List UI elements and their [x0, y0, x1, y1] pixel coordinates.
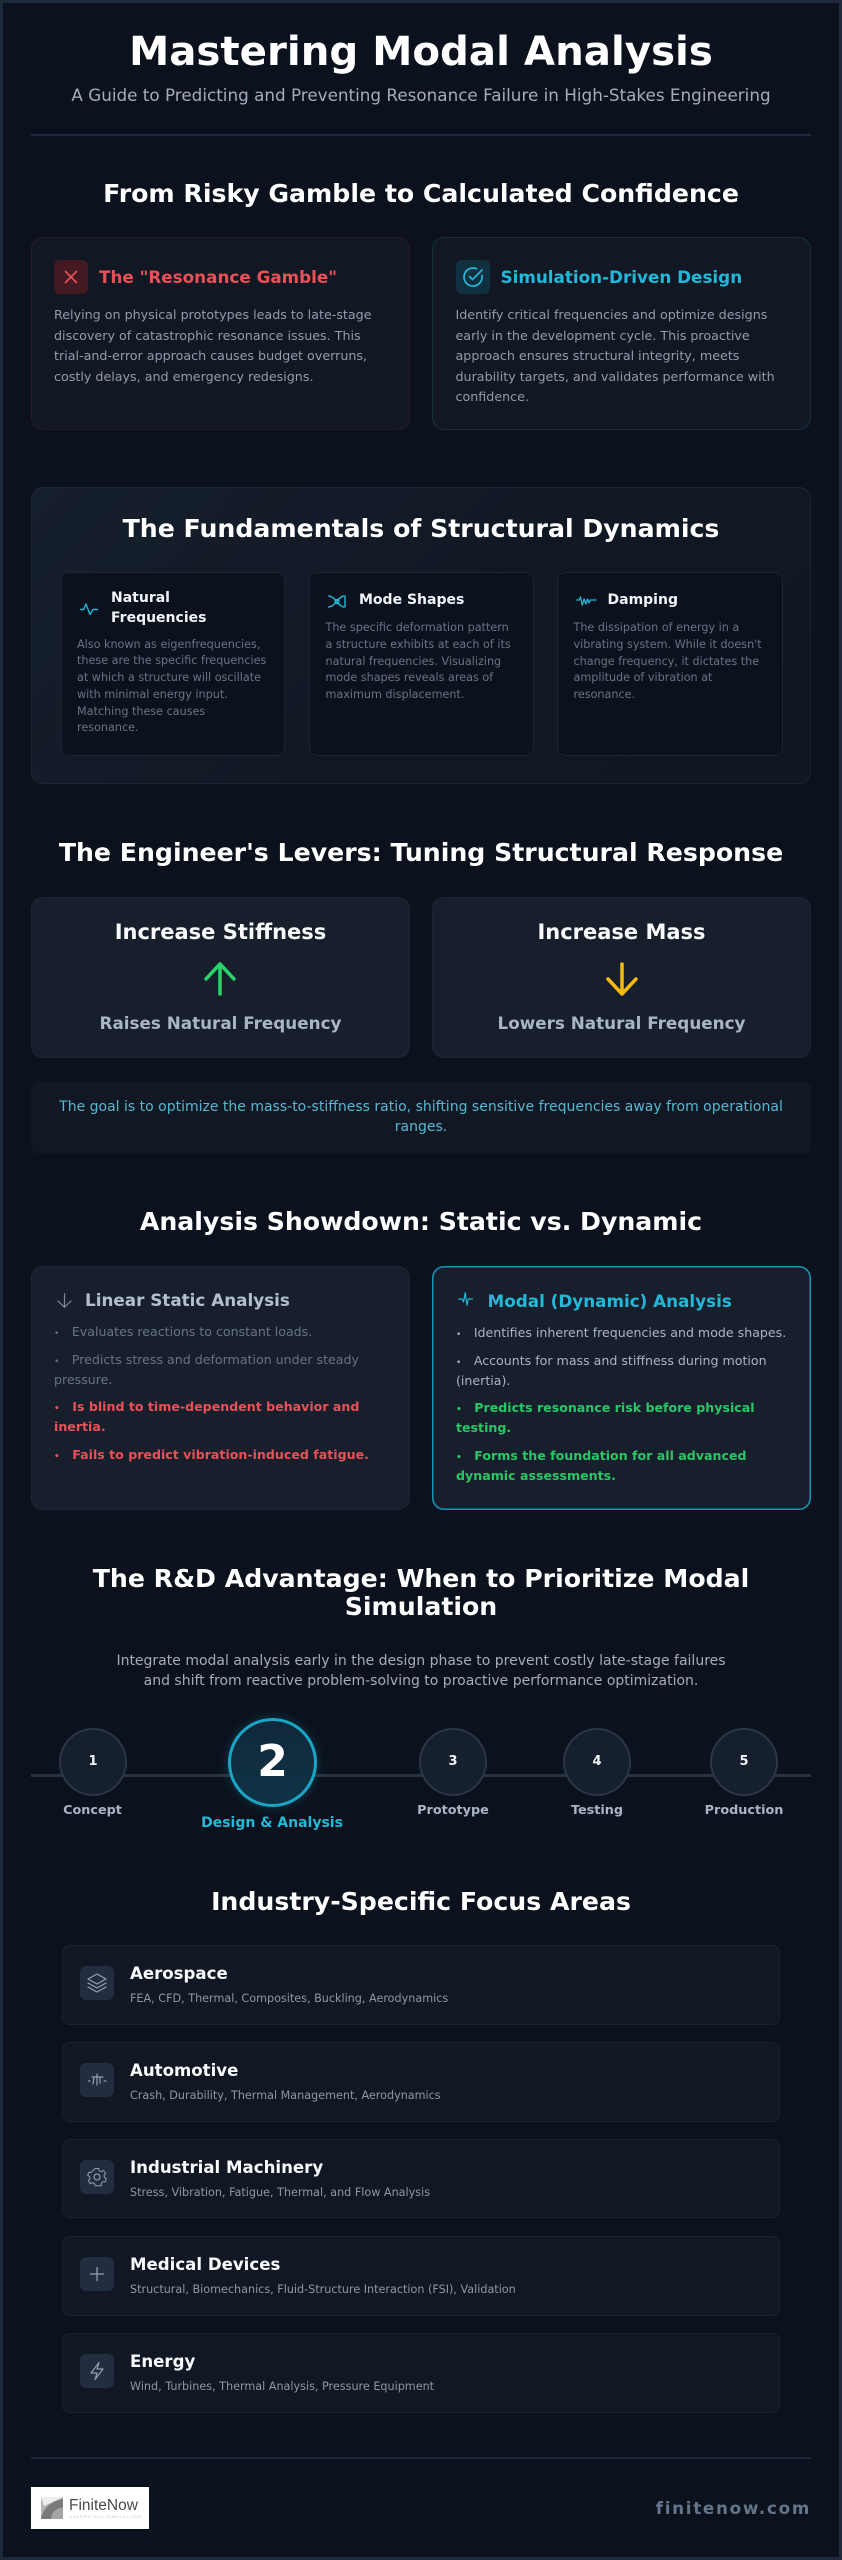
logo wordmark: FiniteNow	[69, 2497, 138, 2514]
callout text	[59, 1099, 783, 1135]
item text: Also known as eigenfrequencies,	[77, 638, 260, 650]
card text: costly delays, and emergency redesigns.	[54, 369, 314, 384]
logo mark	[41, 2497, 63, 2519]
lever effect: Lowers Natural Frequency	[498, 1013, 745, 1033]
callout text: ranges.	[395, 1119, 447, 1135]
panel: modal dynamic analysis	[432, 1266, 811, 1510]
card text: discovery of catastrophic resonance issues. This	[54, 328, 361, 343]
item text: change frequency, it dictates the	[574, 655, 759, 668]
item title: Frequencies	[111, 610, 206, 626]
item text: these are the specific frequencies	[77, 654, 266, 667]
item text	[326, 621, 511, 701]
card: mode shapes	[309, 572, 534, 756]
step 1	[59, 1728, 127, 1796]
step 3	[419, 1728, 487, 1796]
industry name: Automotive	[130, 2061, 238, 2080]
step 3: 3	[448, 1754, 458, 1769]
panel: automotive	[62, 2042, 780, 2122]
card text	[456, 307, 775, 404]
card text: trial-and-error approach causes budget overruns,	[54, 348, 367, 363]
lever title: Increase Mass	[537, 920, 706, 944]
panel: aerospace	[62, 1945, 780, 2025]
feature list: • Evaluates reactions to constant loads. • Predicts stress and deformation under steady	[54, 1324, 359, 1367]
icon: gear	[80, 2160, 114, 2194]
feature list: • Predicts resonance risk before physical	[456, 1400, 755, 1415]
feature list: • Identifies inherent frequencies and mode shapes. • Accounts for mass and stiffness during motion	[456, 1325, 786, 1368]
card text: Identify critical frequencies and optimize designs	[456, 307, 767, 322]
step 4: 4	[592, 1754, 602, 1769]
column heading: Linear Static Analysis	[85, 1290, 290, 1310]
panel: simulation-driven design	[432, 237, 811, 430]
feature list	[54, 1324, 369, 1462]
panel: energy	[62, 2333, 780, 2413]
feature list: dynamic assessments.	[456, 1468, 616, 1483]
panel: linear static analysis	[31, 1266, 410, 1510]
card text: durability targets, and validates performance with	[456, 369, 775, 384]
feature list: pressure.	[54, 1372, 112, 1387]
footer url: finitenow.com	[656, 2498, 811, 2518]
panel: increase mass	[432, 897, 811, 1058]
step 5: 5	[739, 1754, 749, 1769]
industry name: Energy	[130, 2352, 195, 2371]
icon: damped wave	[576, 596, 597, 606]
panel: industrial machinery	[62, 2139, 780, 2218]
step 1 label: Concept	[63, 1803, 122, 1818]
icon: wave	[80, 603, 98, 616]
feature list: testing. • Forms the foundation for all advanced	[456, 1420, 747, 1463]
industry name: Aerospace	[130, 1964, 228, 1983]
item text: at which a structure will oscillate	[77, 671, 261, 684]
industry text: FEA, CFD, Thermal, Composites, Buckling, Aerodynamics	[130, 1992, 448, 2005]
panel: resonance gamble	[31, 237, 410, 430]
item text	[574, 621, 762, 701]
item text: amplitude of vibration at	[574, 671, 712, 684]
title: Mastering Modal Analysis	[129, 28, 713, 75]
icon: plus	[80, 2257, 114, 2291]
panel: medical devices	[62, 2236, 780, 2316]
item title: Mode Shapes	[359, 592, 464, 608]
step 4 label: Testing	[571, 1803, 623, 1818]
feature list: (inertia).	[456, 1373, 510, 1388]
item text: The specific deformation pattern	[326, 621, 509, 634]
icon: arrow down	[606, 962, 638, 996]
timeline	[31, 1774, 811, 1777]
text: R&D intro: Integrate modal analysis early in the design phase to prevent costly late-stage failures	[116, 1653, 726, 1669]
step 2 label: Design & Analysis	[201, 1815, 343, 1831]
heading: R&D advantage: The R&D Advantage: When to Prioritize Modal	[93, 1564, 749, 1593]
item text: with minimal energy input.	[77, 688, 228, 701]
item text	[77, 638, 266, 734]
item title: Damping	[608, 592, 678, 608]
icon: automotive	[80, 2063, 114, 2097]
heading: levers: The Engineer's Levers: Tuning Structural Response	[59, 838, 783, 867]
item title	[111, 590, 206, 626]
callout text: The goal is to optimize the mass-to-stiffness ratio, shifting sensitive frequencies away from operational	[59, 1099, 783, 1115]
icon: pulse	[458, 1292, 473, 1306]
heading: R&D advantage: Simulation	[345, 1592, 497, 1621]
item text: resonance.	[77, 721, 139, 734]
industry text: Structural, Biomechanics, Fluid-Structure Interaction (FSI), Validation	[130, 2283, 516, 2296]
step 1: 1	[88, 1754, 98, 1769]
industry text: Stress, Vibration, Fatigue, Thermal, and Flow Analysis	[130, 2186, 430, 2199]
feature list	[456, 1325, 786, 1483]
logo	[31, 2487, 149, 2529]
item text: natural frequencies. Visualizing	[326, 655, 501, 668]
card text: early in the development cycle. This proactive	[456, 328, 750, 343]
panel: increase stiffness	[31, 897, 410, 1058]
item text: a structure exhibits at each of its	[326, 638, 511, 651]
item text: Matching these causes	[77, 705, 205, 718]
item text: The dissipation of energy in a	[574, 621, 739, 634]
card text: confidence.	[456, 389, 529, 404]
card text	[54, 307, 372, 384]
industry text: Wind, Turbines, Thermal Analysis, Pressure Equipment	[130, 2380, 434, 2393]
icon: layers	[80, 1966, 114, 2000]
step 4	[563, 1728, 631, 1796]
text: R&D intro: and shift from reactive problem-solving to proactive performance optimization.	[144, 1673, 698, 1689]
industry name: Medical Devices	[130, 2255, 280, 2274]
heading: R&D advantage	[92, 1564, 749, 1621]
heading: industry: Industry-Specific Focus Areas	[211, 1887, 631, 1916]
feature list: • Is blind to time-dependent behavior and	[54, 1399, 359, 1414]
heading: gamble to confidence: From Risky Gamble to Calculated Confidence	[103, 179, 739, 208]
column heading: Modal (Dynamic) Analysis	[488, 1291, 732, 1311]
icon: x mark	[54, 260, 88, 294]
icon: arrow up	[204, 962, 236, 996]
logo tagline: UNDERSTAND SIMULATIONS	[69, 2514, 142, 2519]
card text: Relying on physical prototypes leads to late-stage	[54, 307, 372, 322]
callout: goal	[31, 1081, 811, 1154]
industry name: Industrial Machinery	[130, 2158, 323, 2177]
icon: arrow down	[57, 1293, 72, 1308]
item title: Natural	[111, 590, 170, 606]
step 2	[228, 1718, 317, 1807]
card: natural frequencies	[61, 572, 285, 756]
text: R&D intro	[116, 1653, 726, 1689]
card text: approach ensures structural integrity, meets	[456, 348, 739, 363]
icon: mode shape	[328, 595, 346, 608]
item text: resonance.	[574, 688, 635, 701]
lever effect: Raises Natural Frequency	[100, 1013, 341, 1033]
step 2: 2	[257, 1736, 288, 1787]
timeline axis	[31, 1774, 811, 1777]
heading: showdown: Analysis Showdown: Static vs. Dynamic	[140, 1207, 702, 1236]
lever title: Increase Stiffness	[115, 920, 326, 944]
card: damping	[556, 572, 782, 756]
card heading: Simulation-Driven Design	[500, 267, 742, 287]
industry text: Crash, Durability, Thermal Management, Aerodynamics	[130, 2089, 441, 2102]
subtitle: A Guide to Predicting and Preventing Resonance Failure in High-Stakes Engineering	[71, 85, 771, 105]
icon: check circle	[456, 260, 490, 294]
item text: vibrating system. While it doesn't	[574, 638, 762, 651]
panel: fundamentals	[31, 487, 811, 784]
card heading: The "Resonance Gamble"	[99, 267, 337, 287]
heading: fundamentals: The Fundamentals of Structural Dynamics	[123, 514, 719, 543]
step 5 label: Production	[705, 1803, 783, 1818]
feature list: inertia. • Fails to predict vibration-induced fatigue.	[54, 1419, 369, 1462]
icon: lightning bolt	[80, 2354, 114, 2388]
item text: maximum displacement.	[326, 688, 464, 701]
item text: mode shapes reveals areas of	[326, 671, 493, 684]
step 3 label: Prototype	[417, 1803, 489, 1818]
step 5	[710, 1728, 778, 1796]
